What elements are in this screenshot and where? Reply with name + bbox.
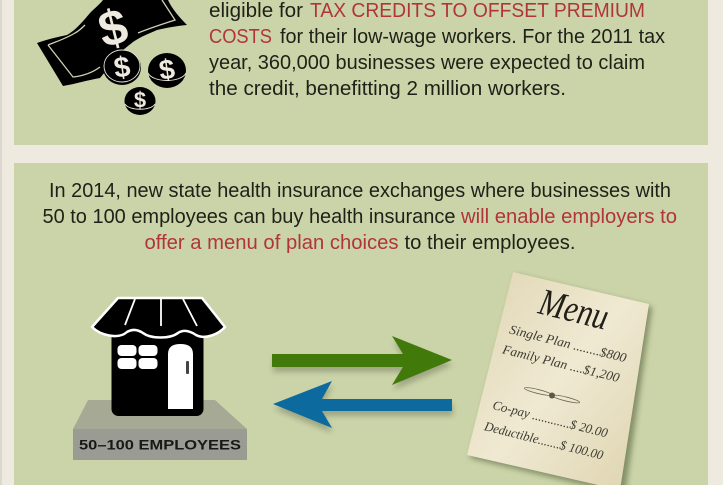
text block: exchanges intro: 50 to 100 employees can buy health insurance: [42, 206, 456, 228]
awning: [92, 298, 225, 338]
text block: tax credit details: COSTS: [209, 26, 272, 48]
icon: money bill and coins: $: [157, 53, 177, 86]
text block: exchanges intro: to their employees.: [404, 232, 576, 254]
text block: tax credit details: year, 360,000 businesses were expected to claim: [209, 52, 645, 74]
menu card: Deductible.......$ 100.00: [482, 418, 605, 463]
menu card: Single Plan ........$800: [508, 322, 629, 365]
arrow: right green: [272, 336, 453, 390]
menu card: Menu: [534, 281, 613, 339]
building: [112, 325, 204, 416]
icon: money bill and coins: [37, 0, 187, 115]
icon: money bill and coins: $: [112, 51, 132, 85]
text block: tax credit details: TAX CREDITS TO OFFSET PREMIUM: [310, 0, 645, 22]
panel: health insurance exchanges: [14, 163, 708, 485]
menu card: [467, 272, 652, 485]
menu card: Family Plan ....$1,200: [500, 341, 622, 385]
platform: 50–100 EMPLOYEES: [79, 436, 241, 452]
text block: exchanges intro: offer a menu of plan choices: [144, 232, 398, 254]
text block: exchanges intro: [42, 180, 677, 254]
menu card: Co-pay ............$ 20.00: [491, 397, 610, 440]
text block: exchanges intro: will enable employers to: [460, 206, 677, 228]
icon: storefront: [73, 298, 247, 460]
text block: tax credit details: for their low-wage workers. For the 2011 tax: [280, 26, 665, 48]
text block: tax credit details: [209, 0, 665, 100]
platform: [73, 400, 247, 460]
arrow: left blue: [273, 381, 453, 433]
menu ornament: [524, 386, 580, 404]
text block: tax credit details: the credit, benefitting 2 million workers.: [209, 78, 566, 100]
text block: tax credit details: eligible for: [209, 0, 303, 22]
text block: exchanges intro: In 2014, new state health insurance exchanges where businesses with: [49, 180, 671, 202]
icon: money bill and coins: $: [134, 88, 146, 112]
panel: tax credits: [14, 0, 708, 145]
